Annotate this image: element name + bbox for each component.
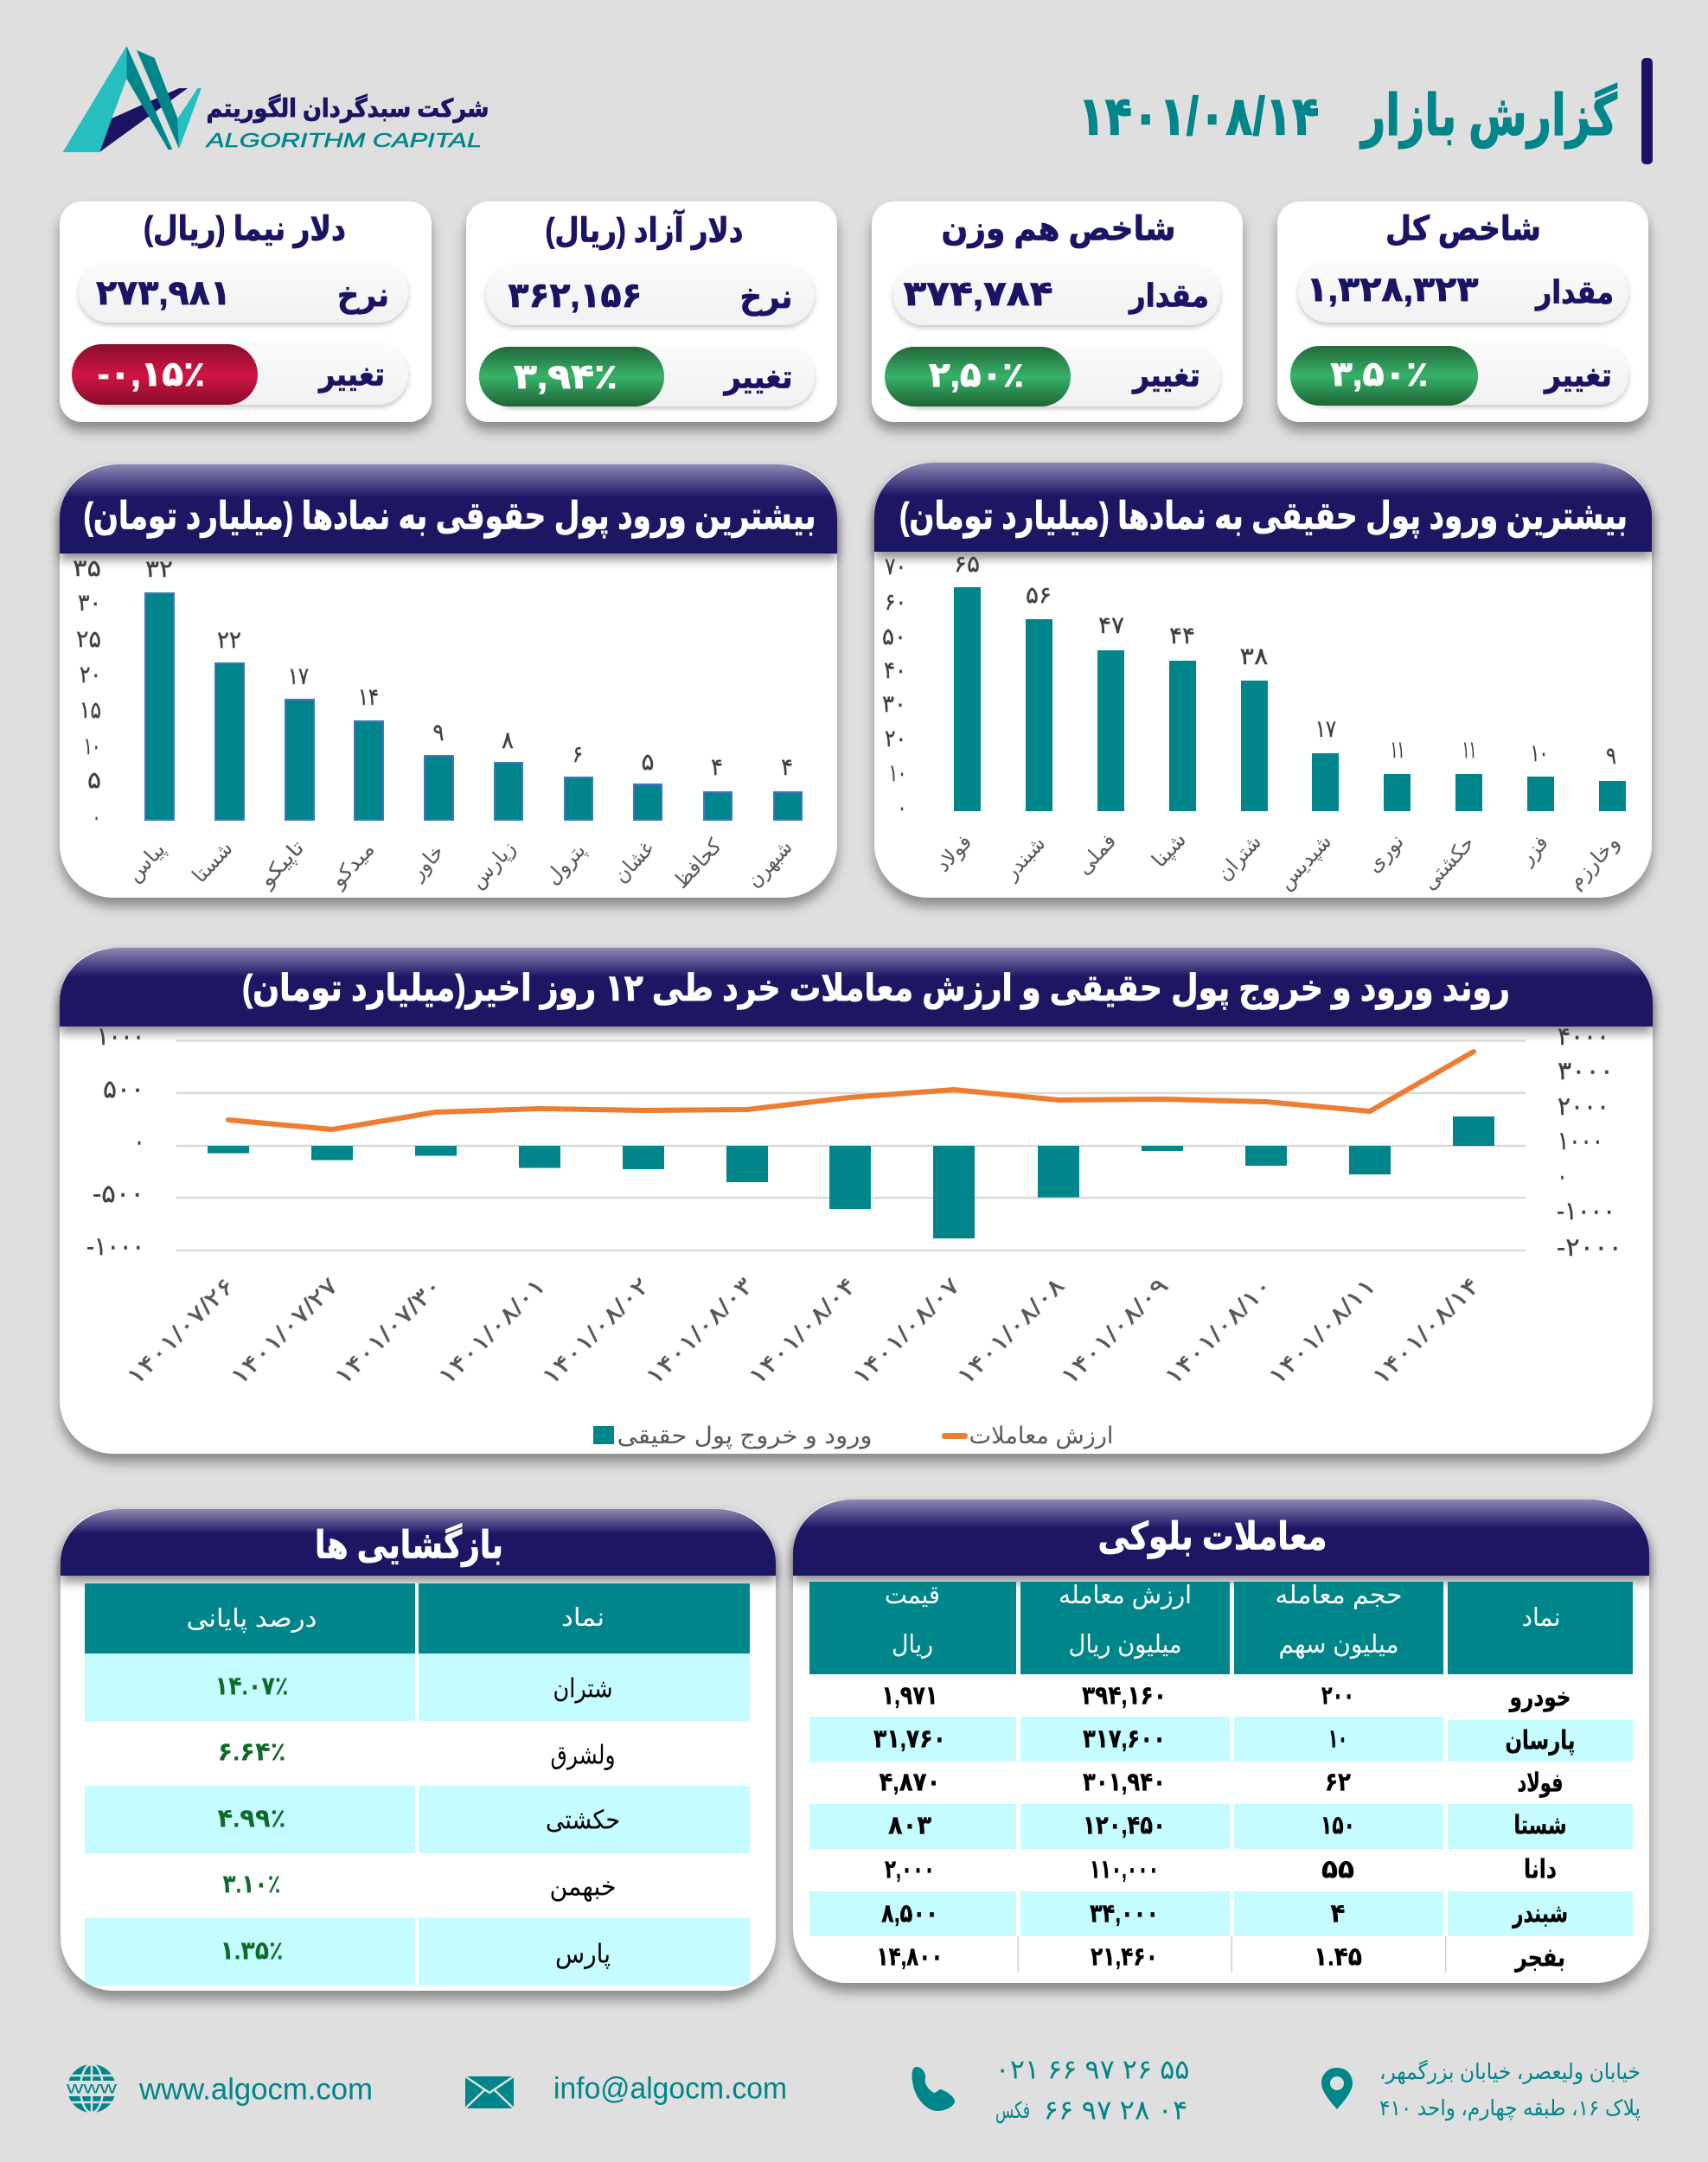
date labels: ۱۴۰۱/۰۸/۰۸ [952, 1272, 1070, 1390]
row: خبهمن [223, 1877, 614, 1902]
right axis: ۰ [1558, 1163, 1567, 1191]
date labels: ۱۴۰۱/۰۸/۰۳ [641, 1272, 758, 1390]
email: info@algocm.com [553, 2072, 787, 2105]
website: www.algocm.com [138, 2072, 373, 2107]
row: change: -۰,۱۵٪ [98, 355, 205, 393]
row: بفجر: ۱.۴۵ [1314, 1942, 1362, 1972]
row: شتران: ۱۴.۰۷٪ [214, 1673, 289, 1700]
data labels: ۱۰ [1531, 740, 1548, 766]
row: ولشرق: ولشرق [550, 1742, 616, 1771]
bars [954, 587, 1626, 811]
table header: نماد [1522, 1604, 1560, 1632]
row: change: تغییر [1131, 358, 1200, 394]
data labels: ۴۷ [1098, 612, 1124, 638]
row: rate: ۲۷۳,۹۸۱ [96, 274, 231, 312]
row: پارسان: ۱۰ [1328, 1724, 1347, 1754]
row: بفجر: بفجر [1513, 1944, 1565, 1972]
panel heading [874, 463, 1652, 552]
data labels: ۳۲ [145, 556, 173, 582]
y axis: ۳۰ [882, 691, 906, 717]
category labels: وخارزم [1564, 831, 1624, 893]
legend [593, 1423, 1114, 1449]
row: حکشتی: ۴.۹۹٪ [218, 1804, 285, 1833]
card heading: شاخص کل [1385, 211, 1541, 249]
row: شبندر: ۴ [1330, 1899, 1346, 1929]
right axis: ۴۰۰۰ [1558, 1023, 1609, 1051]
panel: دلار آزاد [466, 201, 837, 422]
table [85, 1583, 750, 1986]
y axis: ۵۰ [882, 624, 906, 649]
icon: phone [912, 2067, 955, 2111]
row: change [479, 347, 815, 406]
data labels: ۹ [1606, 743, 1616, 769]
row: rate: ۳۶۲,۱۵۶ [509, 277, 642, 315]
y axis: ۶۰ [885, 589, 906, 615]
category labels: شبهرن [742, 835, 797, 892]
table header: درصد پایانی [187, 1605, 317, 1634]
phone number: ۰۲۱ ۶۶ ۹۷ ۲۶ ۵۵ [995, 2055, 1190, 2084]
row: change: ۳,۵۰٪ [1330, 355, 1429, 393]
row: دانا [885, 1858, 1556, 1882]
row: بفجر: ۲۱,۴۶۰ [1091, 1942, 1158, 1972]
y axis: ۷۰ [885, 553, 906, 579]
row: حکشتی [218, 1809, 619, 1832]
category labels: زپارس [465, 836, 521, 893]
left axis: ۵۰۰ [103, 1076, 144, 1103]
row: value: ۱,۳۲۸,۳۲۳ [1306, 271, 1479, 309]
panel: دلار نیما [60, 201, 432, 422]
panel heading: بیشترین ورود پول حقوقی به نمادها (میلیارد تومان) [83, 495, 816, 538]
company name latin: ALGORITHM CAPITAL [204, 129, 482, 151]
table header [809, 1582, 1633, 1674]
row: فولاد: ۳۰۱,۹۴۰ [1083, 1768, 1166, 1797]
category labels: کحافظ [669, 835, 726, 893]
logo [62, 46, 489, 152]
y axis: ۱۰ [84, 733, 100, 759]
panel: 12 day trend chart [60, 948, 1653, 1454]
data labels: ۳۸ [1240, 643, 1268, 669]
y axis: ۳۰ [78, 590, 101, 616]
right axis: ۳۰۰۰ [1558, 1058, 1614, 1085]
icon: mail [465, 2076, 514, 2108]
line: trade value [228, 1052, 1474, 1129]
row: فولاد: ۴,۸۷۰ [879, 1768, 941, 1797]
data labels: ۶۵ [954, 551, 980, 577]
row: خودرو: خودرو [1508, 1683, 1570, 1712]
panel heading [61, 1509, 776, 1576]
data labels: ۱۷ [1315, 716, 1336, 742]
fax number: فکس [995, 2097, 1030, 2123]
y axis: ۳۵ [73, 555, 101, 581]
panel: real money inflow chart [874, 463, 1652, 898]
fax number: ۶۶ ۹۷ ۲۸ ۰۴ [1043, 2095, 1188, 2126]
category labels [931, 828, 1624, 895]
row: rate [486, 265, 815, 325]
table header: میلیون سهم [1278, 1631, 1399, 1660]
data labels: ۹ [432, 720, 445, 745]
panel: شاخص کل [1277, 201, 1648, 422]
row: پارس: ۱.۳۵٪ [220, 1937, 284, 1965]
data labels: ۵ [642, 749, 654, 775]
date labels: ۱۴۰۱/۰۸/۰۴ [744, 1272, 861, 1390]
left axis: -۱۰۰۰ [86, 1233, 144, 1261]
left axis: -۵۰۰ [93, 1180, 144, 1208]
category labels: پیاس [122, 838, 170, 886]
data labels: ۸ [502, 727, 514, 753]
row: ولشرق: ۶.۶۴٪ [218, 1738, 285, 1766]
data labels: ۴ [711, 754, 723, 780]
row: دانا: ۲,۰۰۰ [885, 1856, 935, 1884]
y axis: ۴۰ [884, 657, 906, 683]
category labels: حکشتی [1418, 831, 1479, 895]
row: خبهمن: خبهمن [550, 1873, 616, 1903]
row: خودرو: ۳۹۴,۱۶۰ [1082, 1681, 1167, 1711]
right axis: ۱۰۰۰ [1558, 1128, 1603, 1155]
data labels: ۱۱ [1462, 737, 1476, 763]
row: خودرو: ۱,۹۷۱ [882, 1681, 937, 1711]
address: پلاک ۱۶، طبقه چهارم، واحد ۴۱۰ [1379, 2096, 1641, 2121]
left axis: ۱۰۰۰ [97, 1023, 144, 1051]
icon: globe [64, 2064, 119, 2113]
y axis: ۲۰ [80, 662, 101, 688]
row: شستا: شستا [1513, 1811, 1567, 1840]
date labels: ۱۴۰۱/۰۷/۳۰ [329, 1272, 447, 1390]
panel heading: بازگشایی ها [315, 1522, 503, 1567]
row: فولاد: فولاد [1517, 1769, 1564, 1797]
row: پارسان [873, 1729, 1574, 1756]
row: change: تغییر [317, 356, 385, 393]
y axis [73, 555, 101, 830]
title bar [1641, 58, 1653, 164]
y axis: ۲۰ [885, 726, 906, 752]
category labels: شپدیس [1274, 830, 1336, 894]
row: change: ۲,۵۰٪ [929, 356, 1024, 394]
data labels [145, 556, 793, 780]
row: شبندر: ۸,۵۰۰ [881, 1899, 938, 1929]
category labels: فولاد [931, 830, 976, 877]
address [1379, 2059, 1641, 2121]
category labels: خاور [405, 841, 449, 885]
logo mark [62, 46, 202, 152]
row: شستا [888, 1813, 1565, 1839]
y axis: ۰ [898, 795, 906, 821]
title date: ۱۴۰۱/۰۸/۱۴ [1078, 86, 1320, 147]
category labels: تاپیکو [254, 836, 309, 892]
panel: opening stocks table [61, 1509, 776, 1991]
bars [145, 593, 802, 820]
card heading: شاخص هم وزن [941, 211, 1176, 249]
panel heading [60, 948, 1653, 1027]
panel: block trades table [793, 1500, 1649, 1983]
table header: ریال [892, 1631, 933, 1659]
row: شتران [218, 1678, 611, 1704]
row: شبندر: شبندر [1512, 1899, 1568, 1929]
row: value [893, 265, 1220, 325]
category labels [122, 835, 797, 893]
date labels: ۱۴۰۱/۰۸/۱۰ [1160, 1272, 1277, 1390]
row: change [72, 344, 408, 405]
date labels: ۱۴۰۱/۰۸/۰۹ [1056, 1272, 1174, 1390]
y axis: ۰ [93, 804, 100, 830]
row: پارسان: ۳۱۷,۶۰۰ [1083, 1724, 1166, 1754]
panel: institutional money inflow chart [60, 464, 837, 898]
date labels [122, 1272, 1485, 1390]
row: فولاد: ۶۲ [1325, 1768, 1351, 1797]
row: شستا: ۱۲۰,۴۵۰ [1083, 1811, 1166, 1840]
row backgrounds [809, 1717, 1633, 1973]
right axis [1557, 1023, 1622, 1262]
row: شبندر [881, 1904, 1567, 1929]
panel heading [60, 464, 837, 553]
right axis: -۲۰۰۰ [1557, 1234, 1622, 1262]
card heading: دلار نیما (ریال) [144, 211, 346, 249]
company name persian: شرکت سبدگردان الگوریتم [206, 93, 489, 123]
row: خودرو: ۲۰۰ [1321, 1681, 1354, 1711]
row: پارسان: پارسان [1505, 1726, 1576, 1756]
row: value: ۳۷۴,۷۸۴ [903, 275, 1053, 313]
row: دانا: دانا [1524, 1856, 1557, 1884]
data labels: ۲۲ [217, 627, 241, 653]
category labels: فملی [1072, 829, 1121, 880]
data labels: ۴۴ [1169, 623, 1195, 649]
y axis [882, 553, 906, 821]
row: شتران: شتران [553, 1674, 612, 1704]
right axis: -۱۰۰۰ [1557, 1198, 1615, 1225]
date labels: ۱۴۰۱/۰۸/۰۲ [537, 1272, 655, 1390]
row: ولشرق [220, 1743, 614, 1770]
date labels: ۱۴۰۱/۰۸/۱۴ [1367, 1272, 1485, 1390]
row: rate: نرخ [740, 279, 792, 316]
row: change: تغییر [1543, 358, 1612, 394]
legend: ورود و خروج پول حقیقی [617, 1423, 872, 1449]
row: rate: نرخ [337, 278, 389, 314]
grid lines [176, 1041, 1526, 1251]
row: دانا: ۵۵ [1321, 1856, 1354, 1884]
table header: میلیون ریال [1069, 1631, 1181, 1659]
table header [85, 1583, 750, 1653]
row: شبندر: ۳۴,۰۰۰ [1090, 1899, 1159, 1929]
title text: گزارش بازار [1359, 82, 1617, 149]
row: rate [79, 262, 408, 323]
category labels: شستا [188, 837, 238, 887]
data labels: ۱۱ [1391, 737, 1404, 763]
row: value: مقدار [1128, 278, 1209, 315]
footer [64, 2055, 1641, 2126]
category labels: فزر [1515, 831, 1553, 870]
y axis: ۱۵ [80, 697, 101, 723]
y axis: ۲۵ [76, 626, 101, 652]
row: شستا: ۱۵۰ [1321, 1811, 1355, 1840]
row: شستا: ۸۰۳ [888, 1811, 931, 1840]
data labels: ۱۴ [358, 684, 379, 710]
category labels: شبندر [999, 832, 1050, 885]
row backgrounds [85, 1653, 750, 1986]
title [1078, 58, 1653, 164]
left axis [86, 1023, 144, 1261]
data labels: ۴ [781, 754, 793, 780]
address: خیابان ولیعصر، خیابان بزرگمهر، [1379, 2059, 1641, 2085]
data labels: ۱۷ [288, 663, 309, 689]
y axis: ۱۰ [889, 760, 906, 786]
date labels: ۱۴۰۱/۰۷/۲۶ [122, 1272, 240, 1390]
data labels [954, 551, 1616, 769]
row: خبهمن: ۳.۱۰٪ [223, 1870, 280, 1899]
column divider [415, 1653, 419, 1986]
panel heading: معاملات بلوکی [1098, 1515, 1327, 1558]
card heading: دلار آزاد (ریال) [545, 209, 744, 251]
category labels: میدکو [326, 837, 380, 892]
icon: location pin [1321, 2068, 1353, 2109]
date labels: ۱۴۰۱/۰۷/۲۷ [226, 1272, 343, 1390]
table header: حجم معامله [1275, 1582, 1403, 1610]
y axis: ۵ [87, 767, 101, 793]
row: value [1298, 262, 1628, 323]
category labels: شتران [1212, 830, 1266, 886]
row: پارس: پارس [555, 1941, 611, 1970]
date labels: ۱۴۰۱/۰۸/۱۱ [1263, 1272, 1381, 1390]
category labels: غشان [609, 837, 659, 887]
panel heading: روند ورود و خروج پول حقیقی و ارزش معاملات خرد طی ۱۲ روز اخیر(میلیارد تومان) [242, 968, 1510, 1010]
legend: ارزش معاملات [969, 1423, 1114, 1449]
panel heading [793, 1500, 1649, 1576]
left axis: ۰ [134, 1129, 144, 1156]
row: change: تغییر [723, 360, 792, 396]
data labels: ۵۶ [1026, 582, 1052, 608]
category labels: پترول [541, 839, 591, 889]
row: پارس [223, 1942, 611, 1969]
row: بفجر [879, 1948, 1564, 1973]
table [809, 1582, 1633, 1973]
row: change [885, 347, 1220, 406]
right axis: ۲۰۰۰ [1558, 1093, 1609, 1121]
bars: net real money flow [208, 1116, 1494, 1238]
row: بفجر: ۱۴,۸۰۰ [877, 1942, 943, 1972]
table header: قیمت [885, 1582, 940, 1609]
row: خودرو [884, 1686, 1569, 1712]
date labels: ۱۴۰۱/۰۸/۰۱ [433, 1272, 551, 1390]
data labels: ۶ [573, 741, 583, 767]
row: پارسان: ۳۱,۷۶۰ [873, 1724, 946, 1754]
icon: globe: www [66, 2079, 117, 2098]
category labels: شپنا [1148, 828, 1191, 873]
category labels: نوری [1362, 830, 1409, 877]
panel: شاخص هم وزن [872, 201, 1243, 422]
date labels: ۱۴۰۱/۰۸/۰۷ [848, 1272, 965, 1390]
table header: ارزش معامله [1059, 1582, 1192, 1609]
table header: نماد [561, 1604, 605, 1632]
row: change: ۳,۹۴٪ [514, 358, 617, 396]
row: فولاد [879, 1768, 1564, 1797]
row: دانا: ۱۱۰,۰۰۰ [1090, 1856, 1159, 1884]
row: حکشتی: حکشتی [546, 1806, 620, 1835]
row: change [1290, 344, 1628, 406]
row: value: مقدار [1534, 275, 1614, 311]
